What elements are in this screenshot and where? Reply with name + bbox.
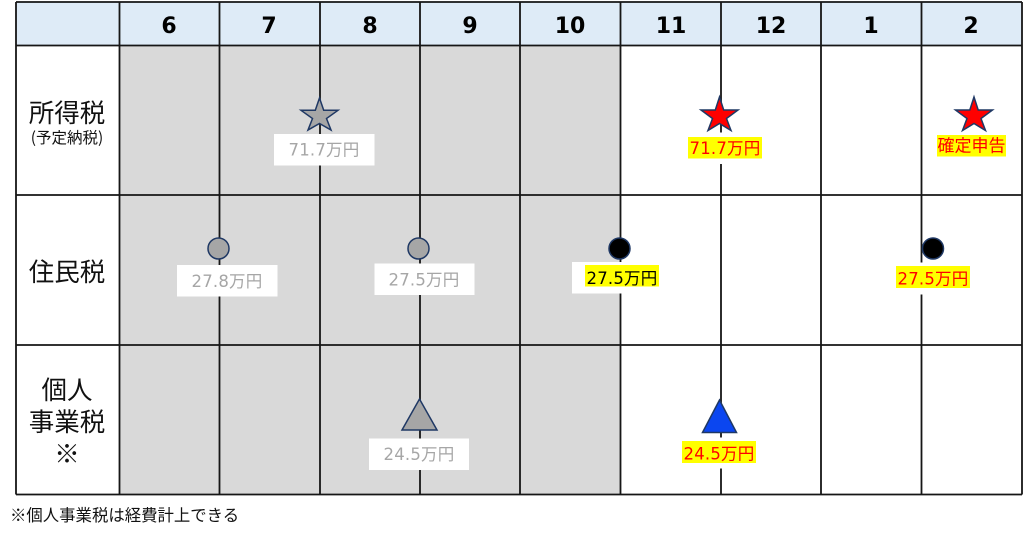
resident tax marker: October: 27.5万円: [587, 269, 657, 288]
business tax marker: August: [369, 399, 469, 470]
row label: business tax: ※: [54, 434, 80, 471]
resident tax marker: January: [883, 238, 983, 294]
business tax marker: November: 24.5万円: [684, 444, 754, 464]
resident tax marker: August: 27.5万円: [389, 270, 459, 290]
row label: resident tax: 住民税: [29, 252, 105, 289]
month headings: 1: [863, 14, 879, 39]
resident tax marker: June: 27.8万円: [192, 272, 262, 291]
resident tax marker: June: [177, 238, 278, 296]
month headings: 10: [555, 14, 585, 39]
footnote: ※個人事業税は経費計上できる: [10, 502, 239, 526]
income tax February marker: red star and final return: [937, 97, 1006, 156]
row label: income tax: 所得税: [29, 93, 105, 130]
income tax November marker: red star and amount: 71.7万円: [690, 139, 760, 158]
month headings: 12: [756, 14, 786, 39]
business tax marker: November: [669, 400, 769, 468]
month headings: 11: [656, 14, 686, 39]
row label: business tax: 個人: [41, 370, 93, 407]
row label: business tax: [29, 370, 105, 471]
income tax November marker: red star and amount: [675, 97, 775, 164]
month headings: 8: [362, 14, 378, 39]
row label: income tax: [29, 93, 105, 148]
row label: income tax: (予定納税): [31, 126, 103, 148]
month headings: 2: [963, 14, 979, 39]
header row background: [16, 2, 1022, 45]
month headings: 6: [161, 14, 177, 39]
income tax February marker: red star and final return: 確定申告: [938, 132, 1006, 156]
month headings: 9: [462, 14, 478, 39]
greyed-out period June to October: [120, 45, 620, 494]
row label: business tax: 事業税: [29, 402, 105, 439]
resident tax marker: August: [374, 238, 474, 295]
resident tax marker: January: 27.5万円: [898, 270, 968, 288]
month headings: 7: [261, 14, 277, 39]
month headings: [161, 14, 979, 39]
income tax June-Oct marker: star and amount: 71.7万円: [289, 140, 359, 160]
resident tax marker: October: [572, 238, 672, 294]
income tax June-Oct marker: star and amount: [274, 98, 374, 166]
business tax marker: August: 24.5万円: [384, 445, 454, 464]
